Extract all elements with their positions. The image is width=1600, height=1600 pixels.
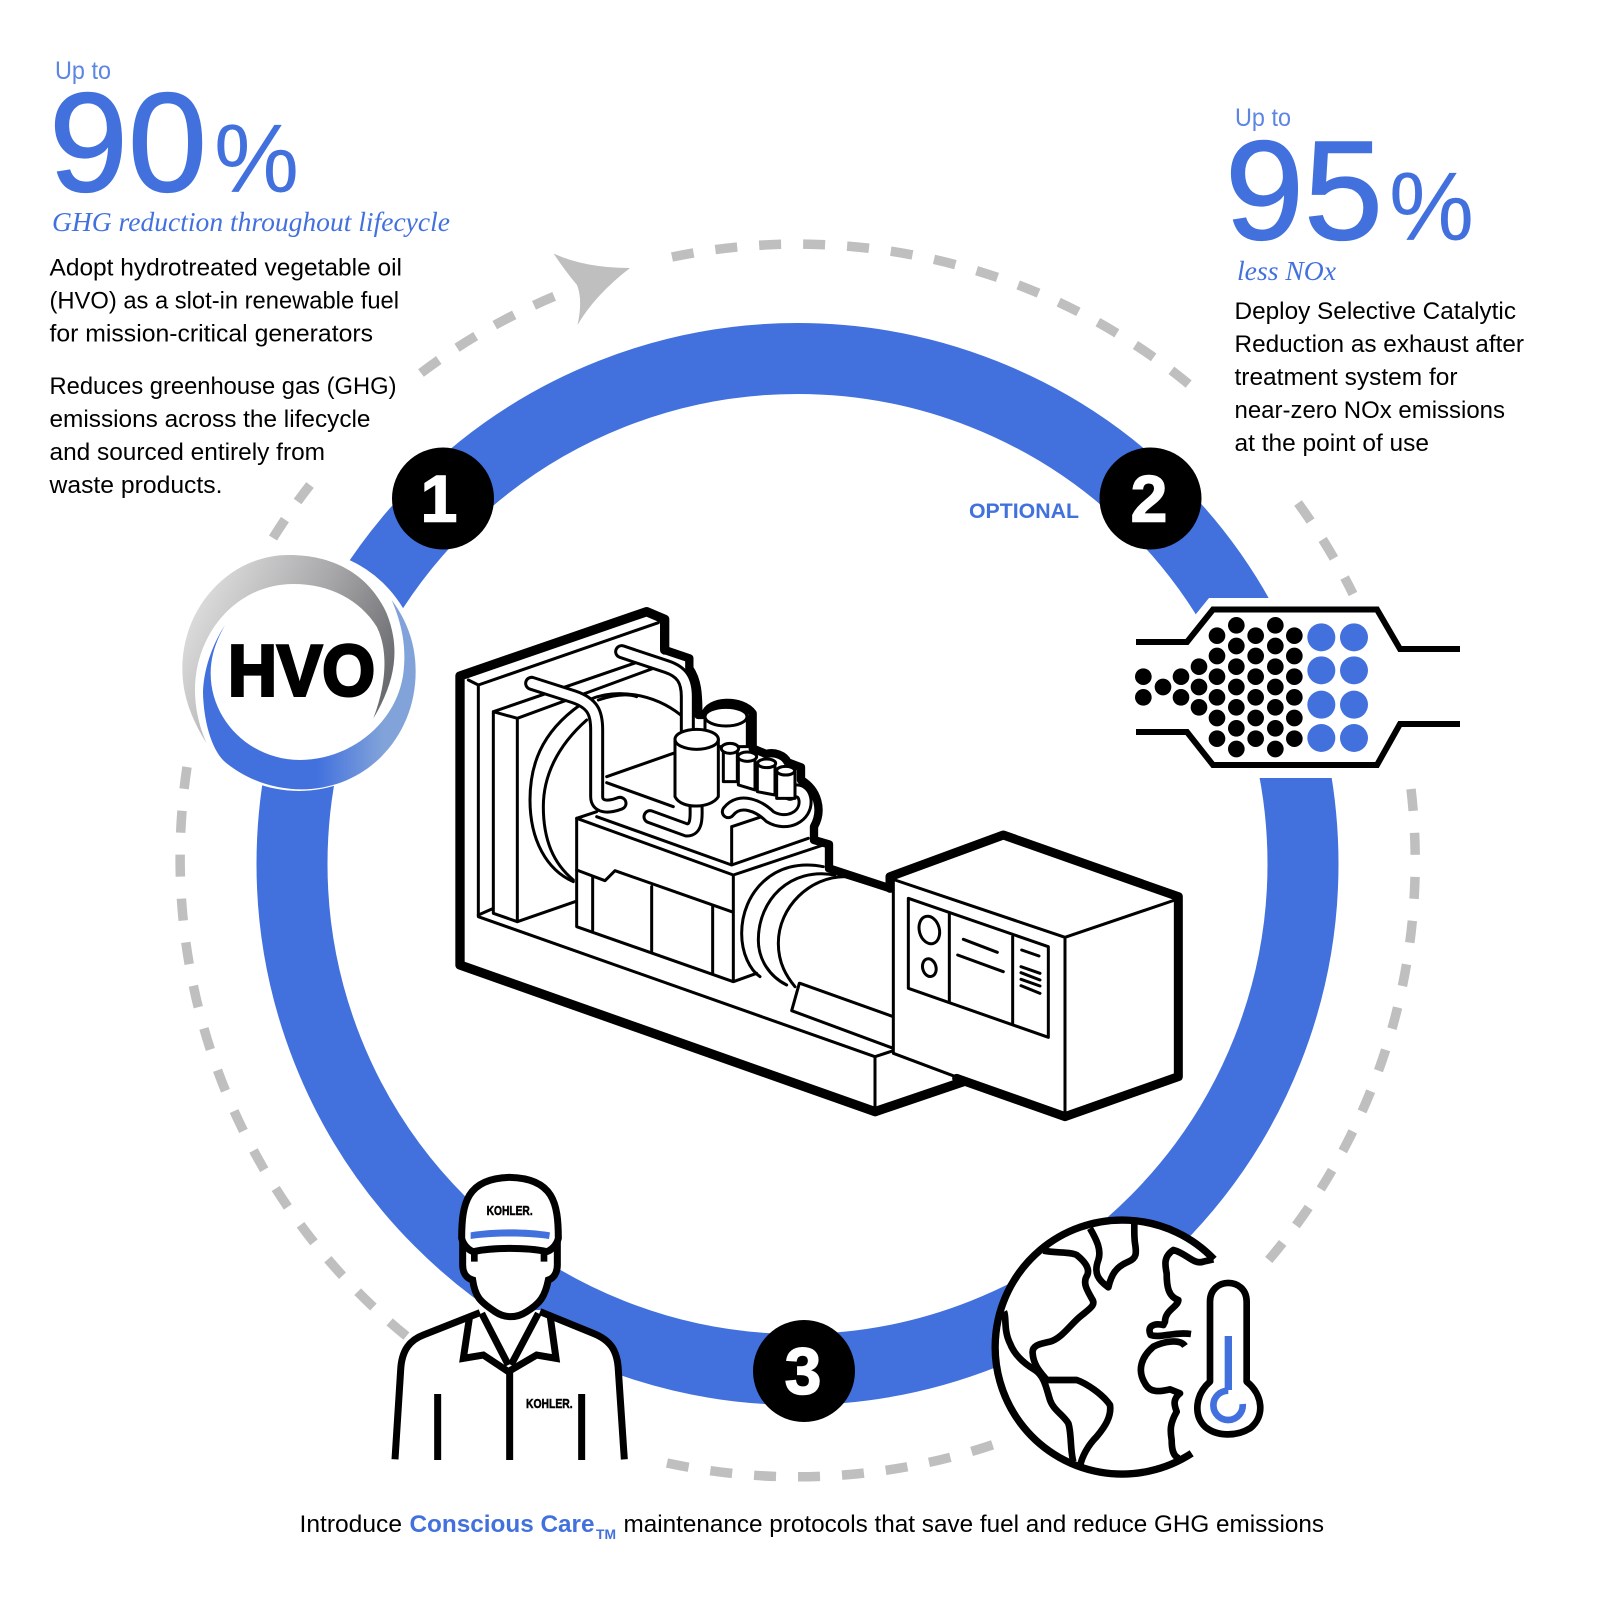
- illustration: generator set: [460, 612, 1178, 1117]
- badge: step 3: 3: [785, 1334, 821, 1408]
- text: HVO description: [48, 254, 402, 499]
- text: SCR description: treatment system for: [1234, 364, 1458, 391]
- arrow head on dashed path: [554, 254, 630, 325]
- stat block: 90 percent: GHG reduction throughout lifecycle: [52, 207, 450, 237]
- stat block: 90 percent: [49, 57, 450, 237]
- stat block: 90 percent: Up to: [55, 57, 111, 85]
- icon: catalytic converter: [1135, 598, 1460, 778]
- text: HVO description: Adopt hydrotreated vegetable oil: [50, 254, 402, 282]
- badge: step 3: [753, 1320, 855, 1422]
- text: Conscious Care caption: TM: [596, 1526, 616, 1542]
- text: Conscious Care caption: Conscious Care: [410, 1511, 594, 1538]
- text: SCR description: Deploy Selective Catalytic: [1234, 298, 1516, 325]
- icon: HVO badge: HVO: [228, 632, 375, 712]
- text: SCR description: Reduction as exhaust after: [1234, 331, 1524, 358]
- icon: globe with thermometer: [995, 1220, 1260, 1474]
- stat block: 95 percent: 95: [1225, 111, 1383, 269]
- text: HVO description: (HVO) as a slot-in renewable fuel: [50, 288, 399, 314]
- icon: technician with Kohler cap and shirt: KOHLER.: [487, 1204, 533, 1218]
- label: optional: OPTIONAL: [969, 500, 1079, 523]
- text: Conscious Care caption: [300, 1511, 1324, 1542]
- thermometer: [1197, 1283, 1260, 1434]
- stat block: 95 percent: [1225, 104, 1474, 286]
- badge: step 2: 2: [1131, 462, 1167, 536]
- text: HVO description: waste products.: [48, 472, 223, 499]
- dashed outer cycle path: [180, 244, 1415, 1477]
- text: SCR description: at the point of use: [1234, 430, 1429, 457]
- text: HVO description: and sourced entirely from: [50, 439, 325, 466]
- text: HVO description: Reduces greenhouse gas (GHG): [50, 373, 396, 400]
- stat block: 90 percent: %: [214, 104, 299, 213]
- icon: HVO badge: [178, 549, 420, 791]
- badge: step 1: 1: [421, 462, 457, 536]
- icon: technician with Kohler cap and shirt: KOHLER.: [526, 1397, 573, 1411]
- stat block: 95 percent: %: [1389, 152, 1474, 261]
- text: Conscious Care caption: Introduce: [300, 1511, 402, 1538]
- text: SCR description: near-zero NOx emissions: [1234, 397, 1505, 424]
- stat block: 95 percent: Up to: [1235, 104, 1291, 132]
- text: SCR description: [1234, 298, 1524, 457]
- badge: step 2: [1100, 448, 1202, 550]
- text: HVO description: emissions across the lifecycle: [50, 406, 370, 433]
- text: Conscious Care caption: maintenance protocols that save fuel and reduce GHG emissions: [624, 1511, 1324, 1538]
- stat block: 95 percent: less NOx: [1237, 256, 1336, 286]
- text: HVO description: for mission-critical generators: [50, 320, 373, 348]
- filters: [675, 707, 795, 806]
- stat block: 90 percent: 90: [49, 63, 207, 221]
- icon: technician with Kohler cap and shirt: [395, 1177, 624, 1460]
- badge: step 1: [392, 448, 494, 550]
- blue process ring: [292, 358, 1303, 1370]
- pipes: [532, 652, 805, 830]
